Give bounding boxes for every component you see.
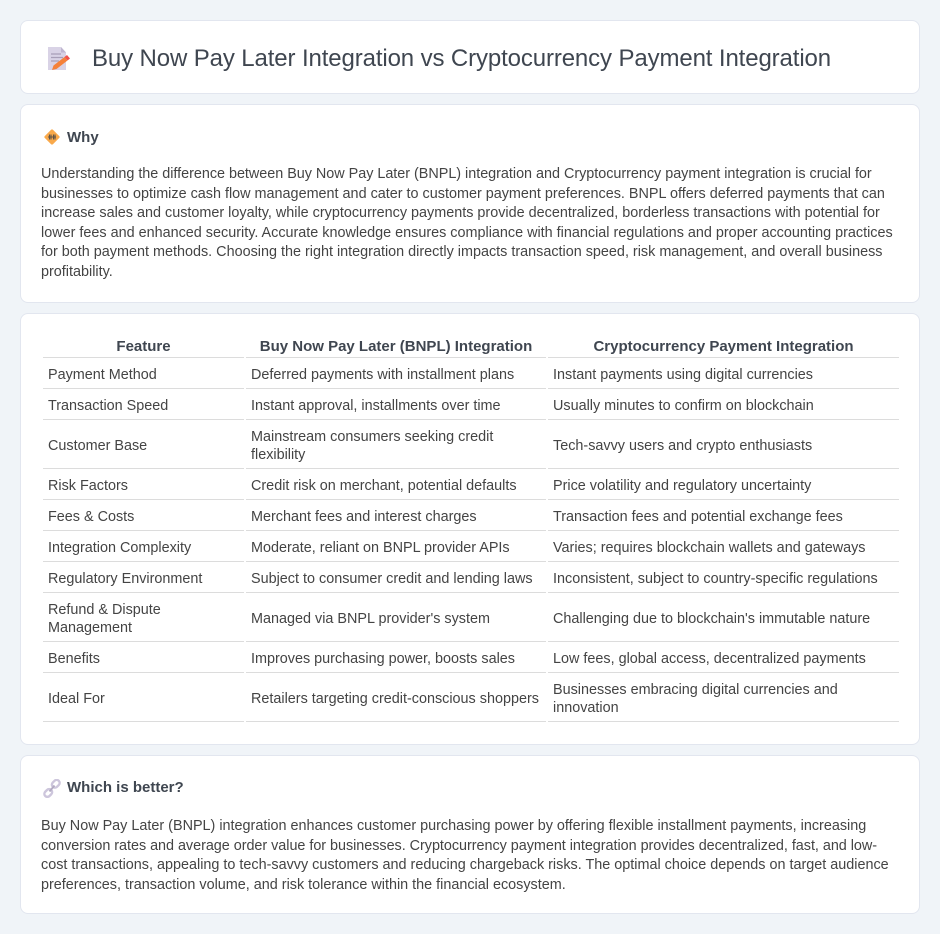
comparison table: Ideal For [48,691,105,707]
comparison table: Transaction Speed [48,398,168,414]
text: why paragraph: businesses to optimize cash flow management and cater to customer payment preferences. BNPL offers deferred payments that can [41,186,885,202]
icon: diamond sign [44,129,60,145]
comparison table: Deferred payments with installment plans [251,367,514,383]
comparison table: Integration Complexity [48,540,191,556]
comparison table: Usually minutes to confirm on blockchain [553,398,814,414]
comparison table: Merchant fees and interest charges [251,509,477,525]
text: why paragraph: profitability. [41,264,113,280]
comparison table: Cryptocurrency Payment Integration [593,338,854,355]
comparison table: Instant payments using digital currencies [553,367,813,383]
comparison table: Payment Method [48,367,157,383]
text: which is better paragraph [41,818,889,892]
comparison table: Subject to consumer credit and lending laws [251,571,533,587]
comparison table: Retailers targeting credit-conscious shoppers [251,691,539,707]
comparison table: Fees & Costs [48,509,134,525]
comparison table: Managed via BNPL provider's system [251,611,490,627]
comparison table: Refund & Dispute [48,602,161,618]
comparison table: innovation [553,700,619,716]
panel: title [20,20,920,94]
text: why paragraph: increase sales and customer loyalty, while cryptocurrency payments provide decentralized, borderless transactions with potential for [41,205,880,221]
comparison table: Low fees, global access, decentralized payments [553,651,866,667]
icon: chain link [43,779,61,798]
comparison table: Varies; requires blockchain wallets and gateways [553,540,866,556]
heading: why: Why [67,129,99,146]
panel: why [20,104,920,303]
title: Buy Now Pay Later Integration vs Cryptocurrency Payment Integration [92,45,831,72]
text: why paragraph [41,166,893,280]
comparison table: Instant approval, installments over time [251,398,501,414]
comparison table: Risk Factors [48,478,128,494]
text: which is better paragraph: preferences, transaction volume, and risk tolerance within the financial ecosystem. [41,876,566,892]
comparison table: Price volatility and regulatory uncertainty [553,478,811,494]
comparison table: Management [48,620,132,636]
comparison table: Feature [116,338,171,355]
text: why paragraph: for both payment methods. Choosing the right integration directly impacts transaction speed, risk management, and overall business [41,244,883,260]
comparison table: Businesses embracing digital currencies and [553,682,838,698]
comparison table: Buy Now Pay Later (BNPL) Integration [260,338,532,355]
panel: which is better [20,755,920,914]
comparison table: Regulatory Environment [48,571,202,587]
comparison table: Transaction fees and potential exchange fees [553,509,843,525]
icon: document with pencil [48,47,70,70]
comparison table: flexibility [251,447,305,463]
comparison table: Inconsistent, subject to country-specific regulations [553,571,878,587]
comparison table: Tech-savvy users and crypto enthusiasts [553,438,812,454]
comparison table: Improves purchasing power, boosts sales [251,651,515,667]
heading: which is better: Which is better? [67,779,184,796]
comparison table: Benefits [48,651,100,667]
text: which is better paragraph: Buy Now Pay Later (BNPL) integration enhances customer purchasing power by offering flexible installment payments, increasing [41,818,866,834]
text: which is better paragraph: conversion rates and average order value for businesses. Cryptocurrency payment integration provides decentralized, fast, and low- [41,838,877,854]
comparison table: Moderate, reliant on BNPL provider APIs [251,540,510,556]
comparison table [43,338,899,722]
comparison table: Challenging due to blockchain's immutable nature [553,611,870,627]
text: why paragraph: Understanding the difference between Buy Now Pay Later (BNPL) integration and Cryptocurrency payment integration is crucial for [41,166,872,182]
text: why paragraph: lower fees and enhanced security. Accurate knowledge ensures compliance with financial regulations and proper accounting practices [41,224,893,240]
panel: comparison table [20,313,920,745]
text: which is better paragraph: cost transactions, appealing to tech-savvy customers and reducing chargeback risks. The optimal choice depends on target audience [41,857,889,873]
comparison table: Credit risk on merchant, potential defaults [251,478,517,494]
comparison table: Mainstream consumers seeking credit [251,429,493,445]
comparison table: Customer Base [48,438,147,454]
